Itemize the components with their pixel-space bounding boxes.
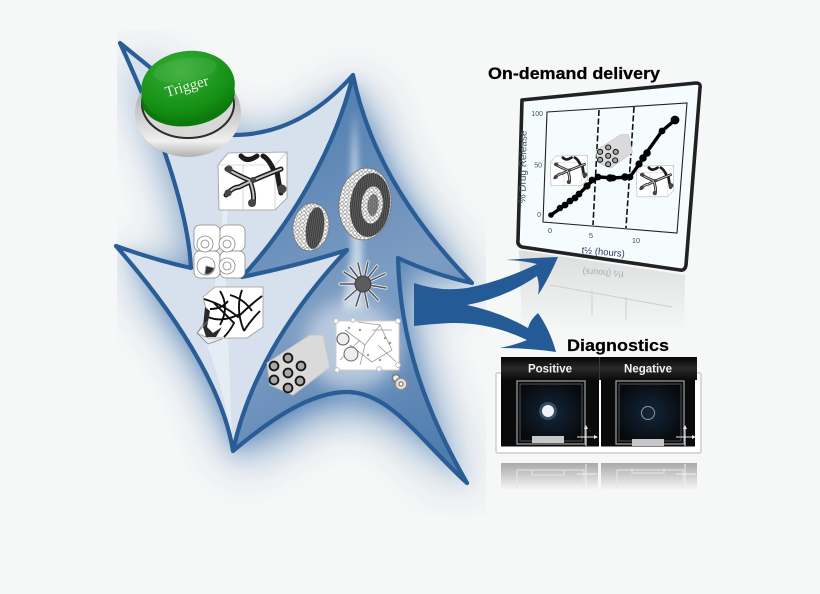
tablet chart: [517, 83, 700, 270]
positive sample photo: [501, 380, 599, 446]
reflected axis label: t½ (hours): [582, 267, 624, 279]
diagnostics reflection: [501, 463, 697, 489]
y axis ticks: [531, 111, 543, 219]
header divider: [598, 357, 600, 380]
star shape: [116, 43, 472, 483]
diagnostics panel: [496, 357, 701, 453]
black header: [501, 357, 697, 380]
blue glow behind star: [118, 55, 478, 495]
light centre glow: [304, 300, 400, 390]
y axis label: % Drug Release: [517, 130, 530, 203]
tablet frame: [518, 83, 700, 270]
small hemisphere vesicle: [290, 201, 332, 253]
tangled cube: [197, 287, 263, 344]
cubic lattice: [194, 225, 245, 278]
infographic canvas: [114, 38, 702, 506]
plot frame: [543, 103, 687, 233]
x axis ticks: 5: [589, 231, 593, 240]
label negative: Negative: [624, 364, 672, 376]
star outline: [116, 43, 472, 483]
y axis ticks: 50: [534, 162, 542, 170]
split arrows: [414, 257, 558, 352]
trigger button: [135, 45, 241, 157]
light vertical streak: [342, 110, 364, 310]
base ring: [142, 70, 234, 138]
button label: Trigger: [163, 73, 211, 101]
pale highlight in left lobe: [203, 170, 232, 440]
negative sample photo: [601, 380, 696, 446]
x axis ticks: [548, 226, 640, 245]
heading: diagnostics: Diagnostics: [567, 337, 669, 355]
inset structures: [550, 156, 588, 186]
chart reflection: [519, 250, 685, 333]
label positive: Positive: [528, 364, 572, 376]
y axis ticks: 0: [537, 212, 541, 219]
dark right lobe: [233, 75, 472, 483]
trigger windows: [593, 107, 634, 228]
bicontinuous cube: [218, 152, 287, 210]
nanostructure icons: [194, 152, 407, 395]
light left lobe: [116, 43, 353, 451]
large hemisphere vesicle: [335, 165, 395, 243]
button base: [135, 69, 241, 157]
green dome lower band: [137, 60, 239, 132]
x axis ticks: 10: [632, 236, 640, 245]
heading: on-demand delivery: On-demand delivery: [488, 65, 661, 83]
network cube: [334, 318, 400, 372]
x axis ticks: 0: [548, 226, 552, 235]
small particle: [392, 374, 407, 390]
green dome: [136, 45, 240, 129]
release curve: [551, 120, 675, 215]
hexagonal tube: [267, 335, 330, 395]
dome highlight: [152, 54, 218, 86]
y axis ticks: 100: [531, 111, 543, 118]
x axis label: t½ (hours): [581, 245, 625, 260]
star micelle: [340, 262, 386, 308]
white card: [496, 373, 701, 453]
inset tube: [596, 135, 633, 168]
data markers: [548, 116, 679, 218]
inset cube: [636, 166, 674, 197]
